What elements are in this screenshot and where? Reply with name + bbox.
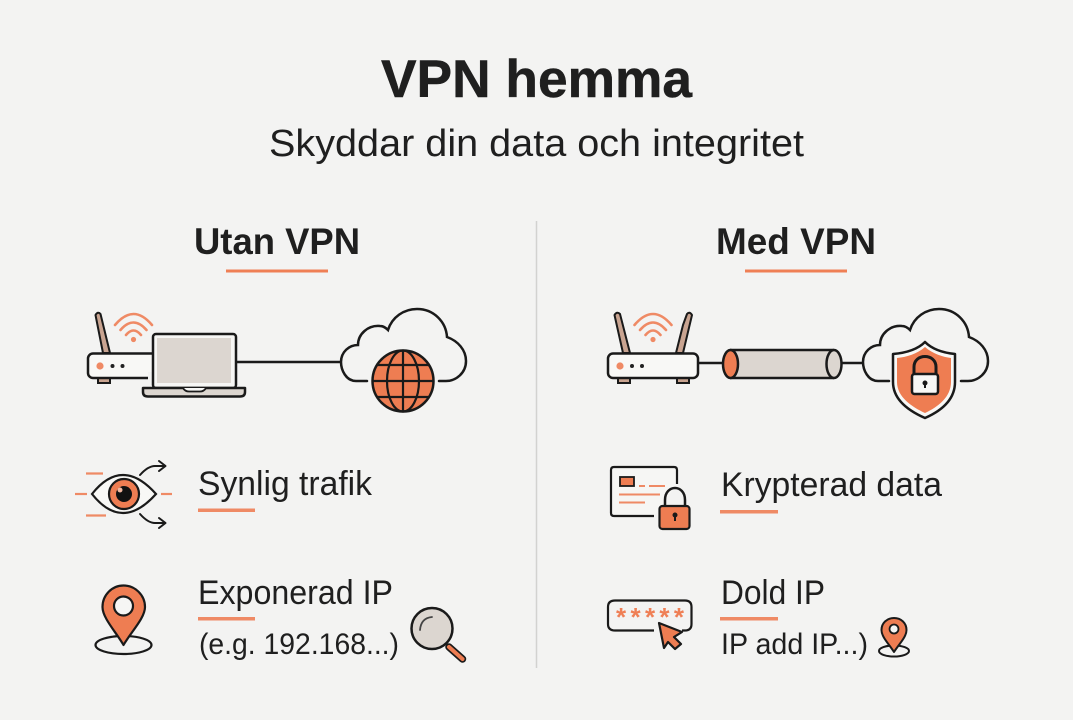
heading: Med VPN: Med VPN bbox=[716, 221, 876, 262]
diagram: router, tunnel and cloud bbox=[608, 309, 988, 418]
icon: password field with cursor: ***** bbox=[616, 602, 685, 632]
item: Dold IP bbox=[608, 574, 909, 661]
label: Synlig trafik bbox=[198, 465, 373, 503]
item: Synlig trafik bbox=[75, 461, 373, 528]
connection lines bbox=[698, 362, 863, 364]
icon: shield with padlock bbox=[893, 342, 955, 418]
heading: Utan VPN: Utan VPN bbox=[194, 221, 360, 262]
icon: cloud bbox=[863, 309, 988, 381]
detail text: (e.g. 192.168...) bbox=[199, 628, 399, 661]
icon: password field with cursor bbox=[608, 600, 692, 649]
panel: Med VPN bbox=[608, 221, 988, 661]
detail text: IP add IP...) bbox=[721, 628, 868, 661]
icon: eye with arrows bbox=[75, 461, 172, 528]
icon: small location pin bbox=[879, 618, 909, 656]
icon: wifi bbox=[115, 314, 152, 342]
icon: wifi bbox=[634, 314, 672, 342]
label: Dold IP bbox=[721, 574, 825, 612]
subtitle: Skyddar din data och integritet bbox=[269, 123, 804, 165]
icon: encrypted tunnel bbox=[723, 350, 842, 378]
label: Exponerad IP bbox=[198, 574, 393, 612]
icon: globe bbox=[372, 350, 434, 412]
item: Krypterad data bbox=[611, 466, 942, 529]
icon: router bbox=[608, 313, 698, 383]
icon: data card with padlock bbox=[611, 467, 690, 529]
icon: location pin bbox=[96, 586, 152, 654]
icon: laptop bbox=[143, 334, 245, 396]
diagram: router, laptop and cloud bbox=[88, 309, 466, 412]
connection line bbox=[236, 361, 342, 363]
icon: router bbox=[88, 313, 158, 383]
icon: magnifying glass bbox=[412, 608, 462, 659]
title: VPN hemma bbox=[381, 50, 693, 109]
label: Krypterad data bbox=[721, 466, 942, 504]
item: Exponerad IP bbox=[96, 574, 462, 661]
panel: Utan VPN bbox=[75, 221, 466, 661]
icon: cloud bbox=[341, 309, 466, 381]
